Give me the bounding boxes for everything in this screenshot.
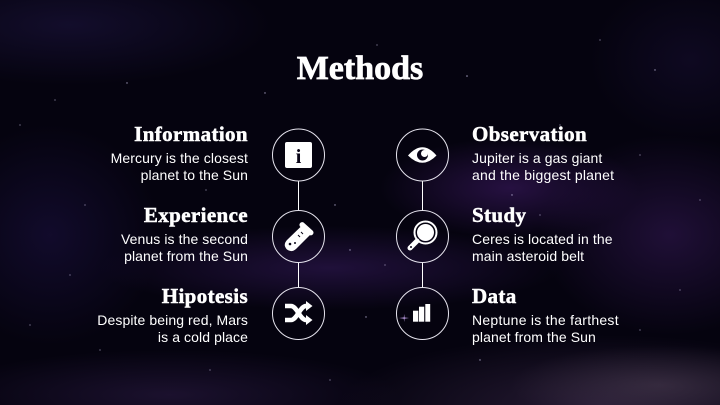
- item: Information: [111, 122, 248, 183]
- icon: information: [285, 142, 312, 168]
- item: Hipotesis: [97, 284, 248, 345]
- item: Experience: Venus is the second: [121, 231, 248, 247]
- item: Study: main asteroid belt: [472, 248, 584, 264]
- item: Hipotesis: Despite being red, Mars: [97, 312, 248, 328]
- item: Information: planet to the Sun: [141, 167, 248, 183]
- item: Study: Study: [472, 203, 526, 227]
- item: Information: Mercury is the closest: [111, 150, 248, 166]
- icon: magnifying glass: [410, 222, 436, 248]
- icon: test tube: [285, 221, 315, 251]
- item: Observation: Jupiter is a gas giant: [472, 150, 602, 166]
- item: Information: Information: [134, 122, 248, 146]
- left connector lines: [298, 181, 300, 287]
- item: Observation: and the biggest planet: [472, 167, 614, 183]
- item: Experience: [121, 203, 248, 264]
- item: Hipotesis: is a cold place: [158, 329, 248, 345]
- item: Data: Data: [472, 284, 517, 308]
- item: Observation: [472, 122, 614, 183]
- icon: bar chart: [413, 304, 430, 322]
- icon: information: i: [296, 146, 302, 168]
- item: Experience: planet from the Sun: [124, 248, 248, 264]
- icon: eye: [408, 147, 436, 163]
- item: Observation: Observation: [472, 122, 587, 146]
- icon circle outlines: [272, 129, 448, 340]
- item: Study: [472, 203, 613, 264]
- item: Data: planet from the Sun: [472, 329, 596, 345]
- item: Data: [472, 284, 619, 345]
- sparkle star: [399, 314, 409, 322]
- item: Experience: Experience: [144, 203, 248, 227]
- icon: shuffle arrows: [285, 301, 312, 325]
- item: Hipotesis: Hipotesis: [162, 284, 248, 308]
- item: Data: Neptune is the farthest: [472, 312, 619, 328]
- title: Methods: [297, 50, 423, 87]
- right connector lines: [422, 181, 424, 287]
- item: Study: Ceres is located in the: [472, 231, 613, 247]
